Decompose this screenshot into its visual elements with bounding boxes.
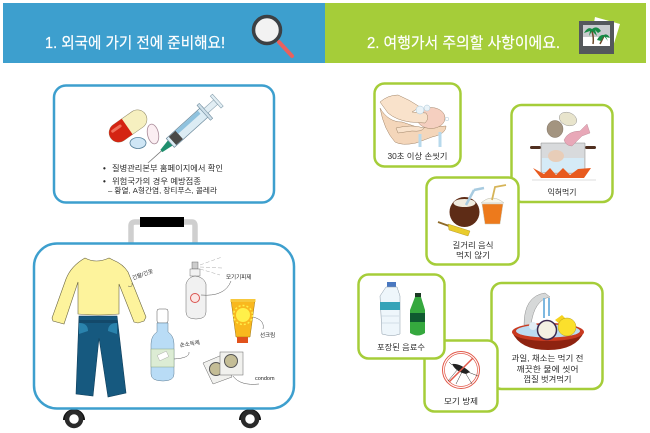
icon: condoms: condom [255, 376, 275, 382]
text block: vaccination notes: 질병관리본부 홈페이지에서 확인 [112, 163, 223, 173]
icon: syringe [141, 93, 225, 170]
icon: sunscreen tube [230, 299, 275, 343]
suitcase wheels [63, 409, 261, 426]
panel: vaccination info [54, 86, 274, 202]
icon: insect repellent spray [186, 257, 251, 319]
label: wash fruit instructions: 깨끗한 물에 씻어 [516, 364, 578, 374]
heading: prepare before going abroad: 1. 외국에 가기 전에 준비해요! [45, 34, 225, 52]
icon: blue tablet [130, 138, 146, 148]
icon: capsule [105, 106, 151, 146]
icon: pink tablet [146, 123, 160, 145]
heading: cautions while travelling: 2. 여행가서 주의할 사항이에요. [367, 34, 560, 52]
icon: photo with palm trees [579, 17, 620, 54]
icon: condoms [203, 352, 275, 384]
label: clothing: 긴팔/긴옷 [131, 268, 154, 282]
label: bottled drinks: 포장된 음료수 [377, 342, 425, 352]
label: street food: 길거리 음식 [452, 241, 494, 250]
panel: wash hands [374, 84, 460, 166]
text block: vaccination notes: 위험국가의 경우 예방접종 [112, 176, 201, 186]
icon: hand sanitizer bottle: 손소독제 [179, 338, 200, 349]
label: wash fruit instructions: 껍질 벗겨먹기 [524, 374, 572, 384]
text block: vaccination notes [103, 163, 223, 195]
icon: no mosquito sign [442, 352, 480, 388]
icon: fruit bowl under tap [512, 293, 584, 350]
label: mosquito prevention: 모기 방제 [444, 396, 478, 406]
icon: yellow shirt [52, 258, 146, 324]
label: wash fruit instructions: 과일, 채소는 먹기 전 [512, 353, 584, 363]
icon: boiling pot with seafood [530, 110, 596, 180]
icon: hand sanitizer bottle [151, 309, 200, 381]
panel: eat cooked food [512, 105, 612, 202]
icon: sunscreen tube: 선크림 [260, 331, 275, 339]
text block: vaccination notes: • [103, 164, 106, 173]
text block: vaccination notes: – 황열, A형간염, 장티푸스, 콜레라 [108, 186, 217, 195]
header: left blue band [3, 3, 325, 63]
label: clothing [128, 268, 154, 287]
panel: wash fruit and vegetables [492, 283, 602, 389]
icon: blue jeans [76, 316, 126, 397]
icon: magnifying glass [254, 16, 292, 56]
icon: water bottle [380, 282, 400, 336]
icon: washing hands [380, 95, 449, 147]
label: wash 30 seconds: 30초 이상 손씻기 [388, 151, 448, 161]
label: eat cooked: 익혀먹기 [548, 187, 576, 197]
panel: avoid street food [426, 178, 518, 264]
text block: vaccination notes: • [103, 177, 106, 186]
panel: bottled drinks [358, 274, 444, 358]
suitcase handle [131, 217, 195, 243]
icon: coconut and juice [438, 185, 506, 236]
label: wash fruit instructions [512, 353, 584, 384]
panel: mosquito prevention [424, 340, 498, 412]
header: right green band [325, 3, 646, 63]
suitcase [34, 217, 294, 426]
icon: insect repellent spray: 모기기피제 [226, 273, 251, 281]
panel: avoid street food: 먹지 않기 [456, 250, 490, 260]
icon: green soda bottle [410, 293, 425, 336]
